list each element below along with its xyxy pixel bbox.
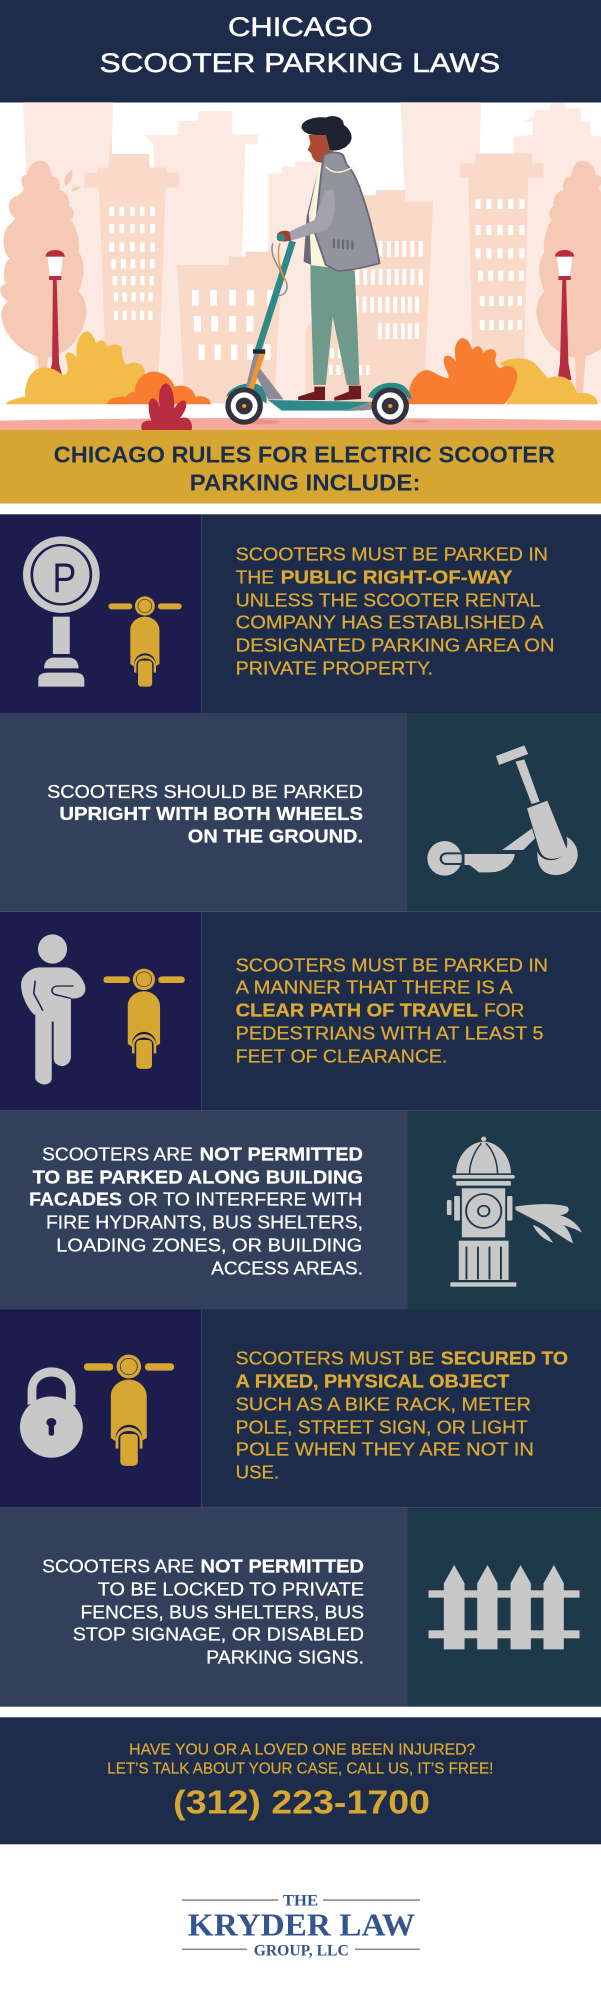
rule 4 text: FIRE HYDRANTS, BUS SHELTERS,: [46, 1212, 363, 1233]
left street lamp: [46, 250, 65, 375]
rule 5 text: POLE, STREET SIGN, OR LIGHT: [236, 1417, 528, 1438]
icon: parking sign: [23, 536, 100, 687]
panel: rule 5 secure to fixed object: [0, 1310, 601, 1508]
rule 5 text: [236, 1347, 568, 1483]
rule 5 text: POLE WHEN THEY ARE NOT IN: [236, 1439, 534, 1460]
panel: rule 3 clear path of travel: [0, 912, 601, 1111]
logo: The Kryder Law Group, LLC: [182, 1893, 420, 1960]
panel: rule 4 building facades: [0, 1111, 601, 1310]
title: [100, 12, 500, 78]
rule 1 text: PRIVATE PROPERTY.: [236, 658, 433, 679]
panel: rule 6 not locked to fences: [0, 1508, 601, 1707]
rule 5 text: A FIXED, PHYSICAL OBJECT: [236, 1371, 510, 1392]
left tree: [0, 161, 86, 375]
logo: The Kryder Law Group, LLC: KRYDER LAW: [188, 1906, 415, 1942]
ground: [0, 404, 601, 430]
right yellow bush: [500, 358, 598, 404]
center orange bush: [107, 372, 211, 404]
rule 4 text: FACADES: [29, 1189, 122, 1210]
icon: parking sign: P: [53, 556, 76, 601]
call to action text: LET’S TALK ABOUT YOUR CASE, CALL US, IT’S FREE!: [107, 1760, 493, 1777]
panel: rule 1 public right-of-way: [0, 514, 601, 713]
rule 5 text: SUCH AS A BIKE RACK, METER: [236, 1394, 531, 1415]
rule 4 text: NOT PERMITTED: [200, 1144, 363, 1165]
rule 1 text: UNLESS THE SCOOTER RENTAL: [236, 590, 540, 611]
rule 6 text: [42, 1556, 364, 1668]
logo: The Kryder Law Group, LLC: GROUP, LLC: [254, 1943, 349, 1960]
rule 6 text: FENCES, BUS SHELTERS, BUS: [80, 1602, 364, 1623]
rule 3 text: A MANNER THAT THERE IS A: [236, 977, 514, 998]
rule 4 text: SCOOTERS ARE: [42, 1144, 193, 1165]
icon: padlock: [20, 1367, 83, 1458]
gold subheading band: [0, 430, 601, 504]
icon: gold moped: [108, 596, 182, 687]
icon: pedestrian: [21, 934, 85, 1084]
right orange bush: [408, 338, 517, 404]
rider: [277, 116, 379, 401]
rule 3 text: [236, 955, 548, 1067]
rule 2 text: ON THE GROUND.: [188, 826, 363, 847]
logo: The Kryder Law Group, LLC: THE: [283, 1893, 318, 1910]
rule 1 text: [236, 544, 555, 679]
rule 1 text: PUBLIC RIGHT-OF-WAY: [281, 567, 513, 588]
rule 4 text: TO BE PARKED ALONG BUILDING: [33, 1167, 363, 1188]
subheading text: PARKING INCLUDE:: [190, 470, 420, 496]
call to action text: [107, 1741, 493, 1777]
left yellow bush: [6, 331, 145, 404]
rule 3 text: PEDESTRIANS WITH AT LEAST 5: [236, 1023, 543, 1044]
header banner: [0, 0, 601, 103]
rule 4 text: LOADING ZONES, OR BUILDING: [56, 1235, 362, 1256]
rule 6 text: SCOOTERS ARE: [42, 1556, 194, 1577]
peach buildings: [84, 132, 544, 403]
icon: gold moped: [103, 969, 185, 1069]
rule 4 text: ACCESS AREAS.: [211, 1258, 363, 1279]
rule 3 text: FOR: [484, 1000, 524, 1021]
call to action text: HAVE YOU OR A LOVED ONE BEEN INJURED?: [129, 1741, 476, 1758]
rule 6 text: PARKING SIGNS.: [206, 1647, 364, 1668]
rule 4 text: OR TO INTERFERE WITH: [128, 1189, 362, 1210]
panel: rule 2 upright parking: [0, 713, 601, 912]
icon: gold moped: [84, 1355, 174, 1466]
right tree: [537, 161, 601, 393]
subheading text: CHICAGO RULES FOR ELECTRIC SCOOTER: [54, 442, 555, 468]
rule 2 text: [47, 781, 363, 847]
red bush: [141, 383, 192, 430]
subheading text: [54, 442, 555, 496]
pale skyline towers: [23, 103, 601, 403]
phone number: (312) 223-1700: [173, 1784, 430, 1821]
call to action banner: [0, 1717, 601, 1844]
building windows: [109, 199, 524, 375]
rule 6 text: TO BE LOCKED TO PRIVATE: [98, 1579, 364, 1600]
icon: kick scooter: [427, 745, 578, 876]
rule 2 text: SCOOTERS SHOULD BE PARKED: [47, 781, 363, 802]
electric scooter: [225, 241, 412, 425]
rule 1 text: SCOOTERS MUST BE PARKED IN: [236, 544, 548, 565]
rule 1 text: THE: [236, 567, 274, 588]
rule 1 text: DESIGNATED PARKING AREA ON: [236, 635, 555, 656]
rule 5 text: SCOOTERS MUST BE: [236, 1347, 434, 1368]
rule 6 text: NOT PERMITTED: [200, 1556, 364, 1577]
rule 5 text: SECURED TO: [441, 1347, 568, 1368]
title: CHICAGO: [228, 12, 373, 42]
rule 5 text: USE.: [236, 1462, 279, 1483]
right street lamp: [555, 250, 574, 380]
rule 4 text: [29, 1144, 363, 1279]
icon: fire hydrant: [447, 1137, 582, 1287]
rule 2 text: UPRIGHT WITH BOTH WHEELS: [59, 803, 363, 824]
title: SCOOTER PARKING LAWS: [100, 48, 500, 78]
icon: picket fence: [429, 1565, 580, 1649]
rule 3 text: CLEAR PATH OF TRAVEL: [236, 1000, 478, 1021]
rule 3 text: SCOOTERS MUST BE PARKED IN: [236, 955, 548, 976]
rule 6 text: STOP SIGNAGE, OR DISABLED: [73, 1624, 364, 1645]
rule 1 text: COMPANY HAS ESTABLISHED A: [236, 612, 544, 633]
rule 3 text: FEET OF CLEARANCE.: [236, 1046, 447, 1067]
illustration: person riding a scooter in the city: [0, 103, 601, 430]
